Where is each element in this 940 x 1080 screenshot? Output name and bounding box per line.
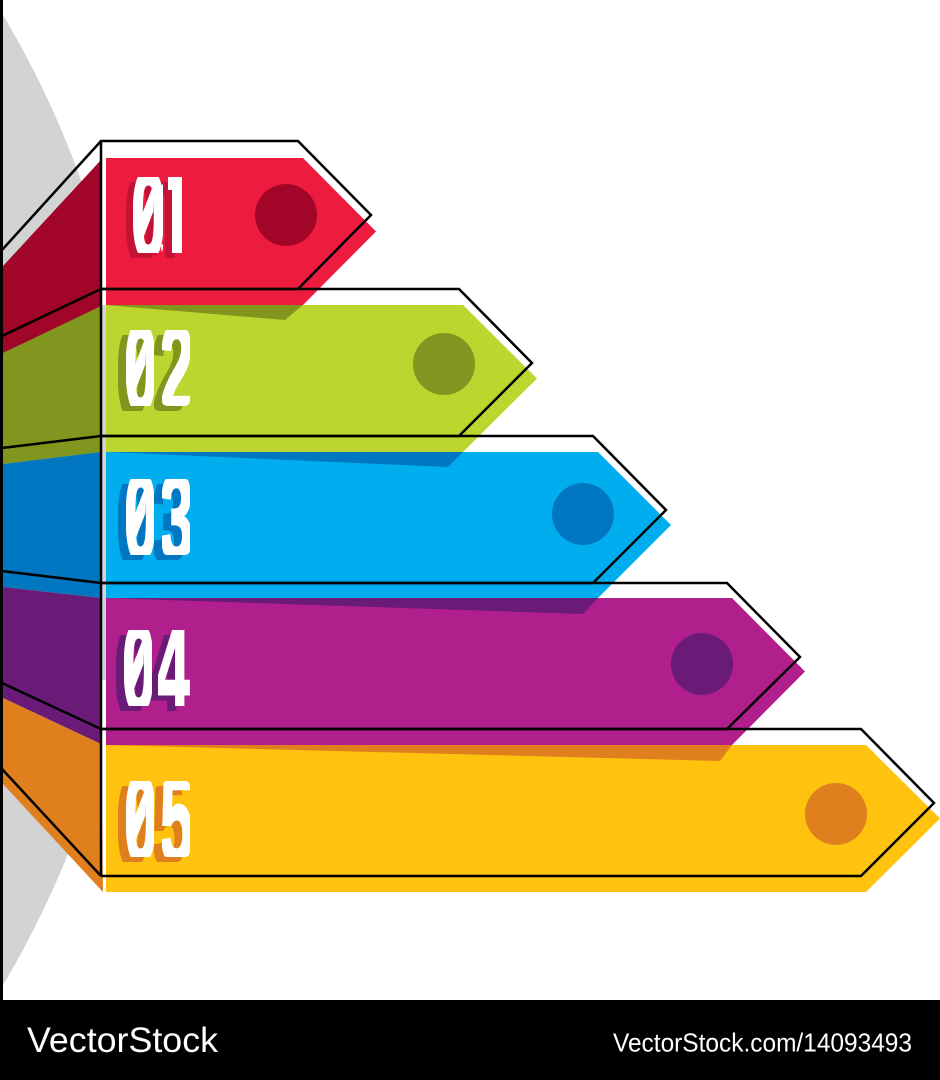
- left side panels: [3, 160, 103, 892]
- number 03: 03: [116, 452, 185, 592]
- number 05: 05: [116, 754, 185, 894]
- arrow 3 blue: [106, 452, 671, 598]
- number 01: 1: [158, 146, 193, 285]
- number 02: [118, 330, 190, 411]
- left vertical axis line: [0, 0, 3, 1000]
- number 05: 05: [124, 749, 193, 889]
- number 02: 02: [116, 303, 185, 443]
- arrow 5 yellow: [106, 745, 940, 892]
- number 01: 0: [131, 146, 166, 285]
- number 03: [118, 479, 190, 560]
- number 01: 1: [151, 151, 186, 290]
- number 03: 03: [124, 447, 193, 587]
- number 01: 0: [124, 151, 159, 290]
- number 02: 02: [124, 298, 193, 438]
- footer url: VectorStock.com/14093493: [613, 1028, 912, 1058]
- number 04: 04: [114, 603, 181, 743]
- arrow 4 purple: [106, 598, 805, 745]
- number 04: 04: [122, 598, 189, 738]
- grey background circle: [0, 10, 137, 990]
- number 04: [116, 630, 190, 711]
- number 01: [126, 177, 182, 258]
- footer bar: [0, 1000, 940, 1080]
- arrow 1 red: [106, 158, 376, 305]
- black outlines: [2, 141, 934, 876]
- arrow 2 green: [106, 305, 537, 452]
- number 05: [118, 781, 190, 862]
- footer brand: VectorStock: [27, 1021, 219, 1060]
